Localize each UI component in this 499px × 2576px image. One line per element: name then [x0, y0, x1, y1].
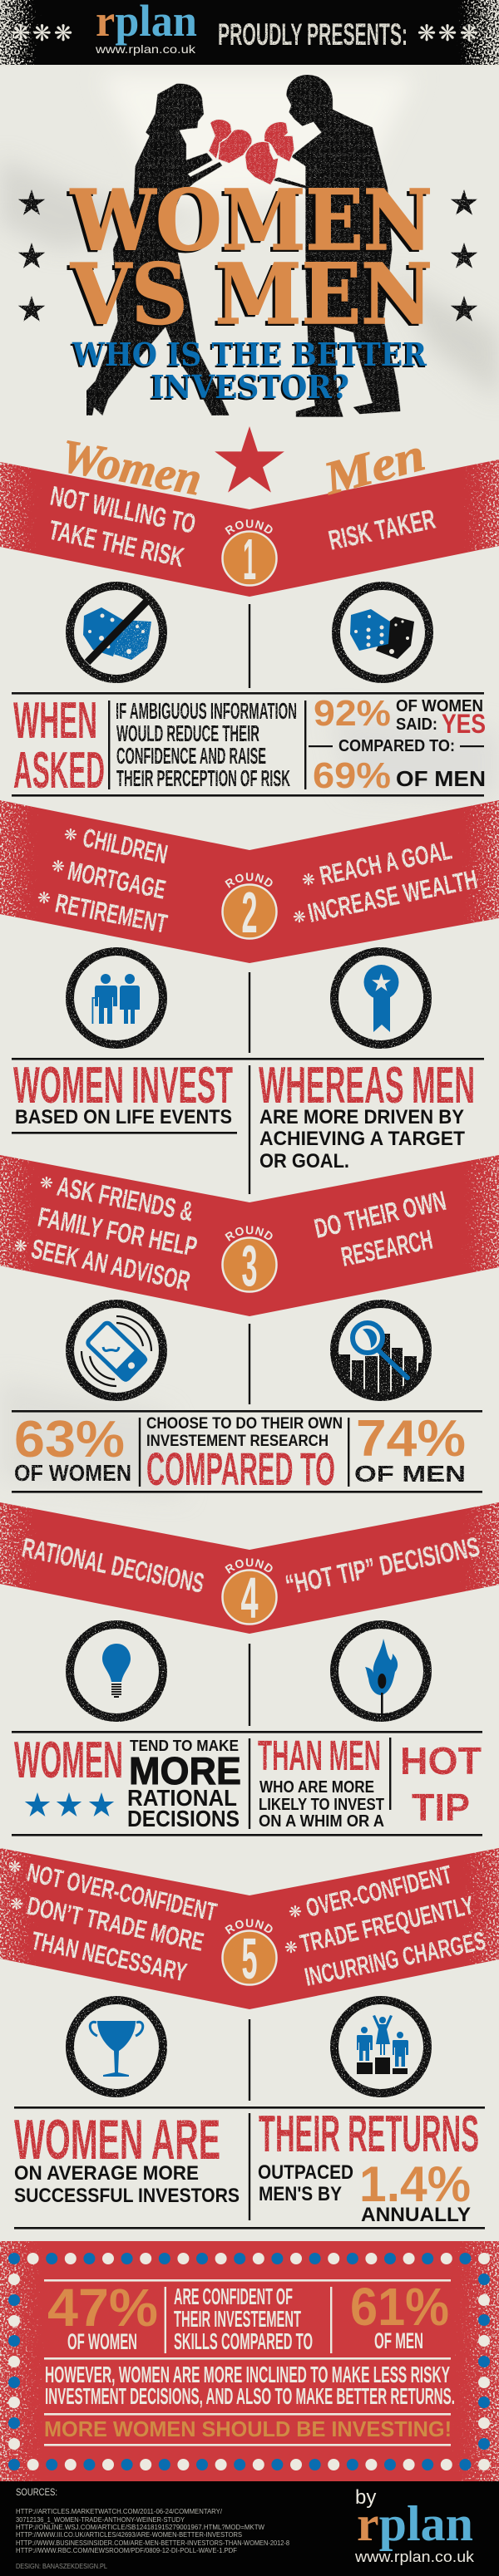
when asked	[13, 692, 105, 799]
ambiguous information text: THEIR PERCEPTION OF RISK	[116, 765, 290, 791]
woman silhouette	[86, 84, 230, 415]
men text	[312, 1185, 449, 1272]
women text: RATIONAL DECISIONS	[20, 1532, 207, 1599]
panel: round 5 stats	[14, 2106, 485, 2229]
women list	[53, 823, 170, 939]
women text: TAKE THE RISK	[47, 514, 187, 573]
panel: round 2 stats	[12, 1057, 484, 1194]
women bullets: ❋	[10, 1895, 23, 1914]
63 percent stat: 63%	[14, 1411, 125, 1468]
ambiguous information text: CONFIDENCE AND RAISE	[116, 743, 266, 769]
women text: SEEK AN ADVISOR	[29, 1233, 193, 1296]
side stars	[18, 189, 477, 322]
sources list: HTTP://ONLINE.WSJ.COM/ARTICLE/SB124181915279001967.HTML?MOD=MKTW	[16, 2523, 264, 2531]
round badge 3: 3	[241, 1233, 258, 1298]
confident text: ARE CONFIDENT OF	[174, 2283, 293, 2309]
panel: round 2	[0, 800, 499, 1049]
icon: magnifier over bar chart	[334, 1304, 431, 1410]
men driven text: ACHIEVING A TARGET	[259, 1128, 465, 1150]
icon: award ribbon	[334, 951, 427, 1045]
decorative flowers: ❋	[12, 21, 30, 47]
panel: round 1	[0, 429, 499, 683]
69 percent stat: 69%	[313, 755, 391, 796]
subtitle: who is the better investor: INVESTOR?	[149, 370, 348, 407]
more rational decisions text	[127, 1738, 241, 1831]
subtitle: who is the better investor: WHO IS THE BETTER	[70, 337, 425, 375]
63 percent stat	[14, 1411, 131, 1486]
47 percent stat: 47%	[47, 2278, 158, 2338]
92 percent stat: YES	[442, 709, 486, 739]
compared to: COMPARED TO:	[338, 737, 455, 755]
74 percent stat	[354, 1410, 466, 1487]
blue dots	[8, 2253, 490, 2470]
panel: round 4 stats	[12, 1731, 482, 1836]
round badge 4: ROUND	[225, 1558, 273, 1574]
sources list	[16, 2507, 289, 2554]
round badge 1: 1	[243, 527, 256, 592]
round badge 5: 5	[241, 1926, 258, 1991]
sources list: HTTP://WWW.BUSINESSINSIDER.COM/ARE-MEN-BETTER-INVESTORS-THAN-WOMEN-2012-8	[16, 2539, 289, 2547]
three blue stars	[25, 1792, 114, 1816]
ambiguous information text	[116, 698, 297, 791]
boxing gloves	[209, 120, 294, 185]
men bullets	[284, 1903, 302, 1957]
round badge 1: ROUND	[225, 519, 273, 535]
centre divider round 1	[249, 604, 250, 688]
footer logo: by	[355, 2486, 376, 2509]
confident text	[174, 2283, 313, 2354]
hot tip: TIP	[412, 1786, 470, 1829]
centre divider round 3	[249, 1324, 250, 1404]
round badge 2: ROUND	[225, 873, 273, 888]
panel: round 3 stats	[12, 1410, 482, 1495]
women bullets: ❋	[14, 1237, 27, 1256]
successful investors text: ON AVERAGE MORE	[14, 2162, 199, 2185]
round badge 4	[221, 1558, 278, 1630]
confident text: SKILLS COMPARED TO	[174, 2328, 313, 2354]
69 percent stat: OF MEN	[396, 766, 486, 791]
more women should be investing: MORE WOMEN SHOULD BE INVESTING!	[44, 2416, 452, 2441]
hot tip	[400, 1739, 482, 1829]
sources list: 30712136_1_WOMEN-TRADE-ANTHONY-WEINER-STUDY	[16, 2515, 185, 2524]
round badge 1	[221, 519, 278, 592]
banner	[0, 460, 499, 597]
women text	[25, 1858, 220, 1987]
92 percent stat: SAID:	[396, 715, 437, 734]
script label: men: Men	[318, 429, 430, 505]
outpaced text	[258, 2161, 353, 2205]
successful investors text: SUCCESSFUL INVESTORS	[14, 2185, 240, 2207]
women bullets	[8, 1858, 23, 1914]
women text: NOT OVER-CONFIDENT	[25, 1858, 220, 1927]
47 percent stat: OF WOMEN	[67, 2329, 137, 2354]
when asked: WHEN	[13, 692, 97, 750]
decorative flowers: ❋	[438, 21, 457, 47]
more rational decisions text: MORE	[129, 1749, 241, 1792]
decorative flowers: ❋	[54, 21, 72, 47]
panel: round 4	[0, 1502, 499, 1722]
however text	[45, 2362, 455, 2409]
whim text	[259, 1778, 384, 1831]
women invest: WOMEN INVEST	[13, 1057, 233, 1114]
decorative flowers: ❋	[417, 21, 436, 47]
men bullets: ❋	[293, 908, 306, 927]
women text	[47, 480, 198, 573]
sources list: HTTP://ARTICLES.MARKETWATCH.COM/2011-06-24/COMMENTARY/	[16, 2507, 223, 2515]
compared to: COMPARED TO	[146, 1443, 335, 1495]
92 percent stat: 92%	[314, 693, 391, 734]
footer	[0, 2481, 499, 2576]
men text: RESEARCH	[338, 1224, 435, 1272]
women text: DON’T TRADE MORE	[25, 1891, 206, 1957]
panel: round 5	[0, 1848, 499, 2097]
own research text: INVESTEMENT RESEARCH	[146, 1433, 329, 1450]
panel: conclusion	[0, 2241, 499, 2481]
centre divider round 4	[249, 1644, 250, 1726]
own research text: CHOOSE TO DO THEIR OWN	[146, 1415, 343, 1433]
round badge 3: ROUND	[225, 1226, 273, 1241]
than men heading: THAN MEN	[258, 1732, 381, 1779]
decorative flowers: ❋	[460, 21, 478, 47]
man silhouette	[272, 75, 400, 417]
92 percent stat: OF WOMEN	[396, 697, 483, 715]
more rational decisions text: DECISIONS	[127, 1806, 240, 1831]
round badge 3	[221, 1226, 278, 1298]
title: women vs men: VS MEN	[70, 245, 432, 343]
based on life events: BASED ON LIFE EVENTS	[15, 1106, 232, 1128]
round badge 5	[221, 1919, 278, 1991]
men bullets: ❋	[302, 871, 315, 889]
men driven text: OR GOAL.	[259, 1150, 349, 1172]
women text: ASK FRIENDS &	[55, 1171, 196, 1227]
subtitle: who is the better investor	[70, 336, 427, 407]
sources list: HTTP://WWW.RBC.COM/NEWSROOM/PDF/0809-12-DI-POLL-WAVE-1.PDF	[16, 2546, 237, 2554]
men bullets: ❋	[289, 1903, 302, 1921]
women bullets: ❋	[52, 858, 65, 876]
title: women vs men	[67, 171, 432, 346]
women bullets: ❋	[37, 889, 51, 907]
successful investors text	[14, 2162, 240, 2207]
centre divider round 2	[249, 972, 250, 1053]
white dots	[8, 2253, 490, 2470]
61 percent stat: OF MEN	[374, 2328, 423, 2353]
women bullets	[14, 1174, 53, 1256]
women list: CHILDREN	[81, 823, 170, 869]
footer logo: rplan	[357, 2496, 473, 2551]
women list: MORTGAGE	[66, 856, 168, 905]
ambiguous information text: WOULD REDUCE THEIR	[116, 720, 259, 746]
women text: FAMILY FOR HELP	[36, 1202, 200, 1262]
women bullets: ❋	[40, 1174, 53, 1192]
whim text: WHO ARE MORE	[259, 1778, 374, 1797]
69 percent stat	[313, 755, 486, 796]
women bullets: ❋	[8, 1858, 22, 1876]
whim text: ON A WHIM OR A	[259, 1812, 384, 1831]
subtitle: who is the better investor: INVESTOR?	[151, 368, 349, 406]
61 percent stat: 61%	[350, 2277, 449, 2337]
banner	[0, 1848, 499, 2009]
men driven text: ARE MORE DRIVEN BY	[259, 1106, 464, 1128]
hot tip: HOT	[400, 1739, 482, 1782]
icon: trophy	[70, 2000, 163, 2093]
icon: light bulb	[70, 1625, 163, 1718]
sources list: HTTP://WWW.III.CO.UK/ARTICLES/42693/ARE-WOMEN-BETTER-INVESTORS	[16, 2530, 242, 2539]
banner	[0, 1502, 499, 1634]
design credit: DESIGN: BANASZEKDESIGN.PL	[16, 2562, 107, 2570]
sources heading: SOURCES:	[16, 2488, 57, 2498]
hero: boxing silhouettes	[86, 75, 400, 417]
decorative flowers	[12, 21, 478, 47]
women are heading: WOMEN ARE	[14, 2108, 220, 2171]
ambiguous information text: IF AMBIGUOUS INFORMATION	[116, 698, 297, 724]
women list: RETIREMENT	[53, 888, 170, 939]
outpaced text: MEN'S BY	[259, 2183, 342, 2205]
annually: ANNUALLY	[361, 2204, 471, 2226]
decorative flowers: ❋	[32, 21, 52, 47]
panel: round 3	[0, 1155, 499, 1401]
icon: crossed-out dice	[70, 586, 163, 679]
men text	[298, 1860, 488, 1992]
women heading: WOMEN	[14, 1732, 123, 1789]
centre divider round 5	[249, 2019, 250, 2101]
title: women vs men: WOMEN	[70, 171, 432, 269]
men driven text	[259, 1106, 465, 1172]
red star	[215, 426, 284, 493]
when asked: ASKED	[13, 742, 105, 799]
women text: THAN NECESSARY	[29, 1926, 190, 1987]
header band	[0, 0, 499, 66]
footer logo: www.rplan.co.uk	[354, 2549, 475, 2565]
icon: burning match	[334, 1625, 427, 1718]
round badge 2	[221, 873, 278, 945]
women bullets	[37, 826, 77, 907]
banner	[0, 800, 499, 963]
icon: elderly couple	[70, 951, 163, 1045]
women text: NOT WILLING TO	[48, 480, 198, 539]
logo: rplan: www.rplan.co.uk	[95, 42, 196, 56]
women text	[29, 1171, 200, 1296]
more rational decisions text: RATIONAL	[127, 1785, 237, 1811]
1.4 percent stat: 1.4%	[359, 2156, 471, 2212]
men text: RISK TAKER	[326, 504, 438, 556]
men bullets	[293, 871, 315, 927]
icon: winners podium	[334, 2000, 427, 2093]
title: women vs men: VS MEN	[67, 248, 429, 346]
round badge 2: 2	[241, 880, 258, 945]
subtitle: who is the better investor: WHO IS THE BETTER	[72, 336, 427, 373]
banner	[0, 1155, 499, 1316]
script label: women: Women	[57, 430, 205, 505]
63 percent stat: OF WOMEN	[14, 1460, 131, 1486]
icon: phone	[70, 1304, 163, 1397]
panel: round 1 stats	[12, 692, 486, 799]
outpaced text: OUTPACED	[258, 2161, 353, 2184]
title: women vs men: WOMEN	[67, 174, 429, 272]
own research text	[146, 1415, 343, 1450]
whim text: LIKELY TO INVEST	[259, 1796, 384, 1814]
74 percent stat: 74%	[356, 1410, 466, 1467]
round badge 5: ROUND	[225, 1919, 273, 1934]
round badge 4: 4	[241, 1566, 259, 1630]
icon: dice	[336, 586, 429, 679]
more rational decisions text: TEND TO MAKE	[130, 1738, 239, 1754]
men bullets: ❋	[284, 1939, 298, 1957]
women bullets: ❋	[64, 826, 77, 844]
confident text: THEIR INVESTEMENT	[174, 2306, 301, 2332]
footer logo	[354, 2486, 475, 2565]
74 percent stat: OF MEN	[354, 1461, 466, 1487]
92 percent stat	[314, 693, 486, 739]
